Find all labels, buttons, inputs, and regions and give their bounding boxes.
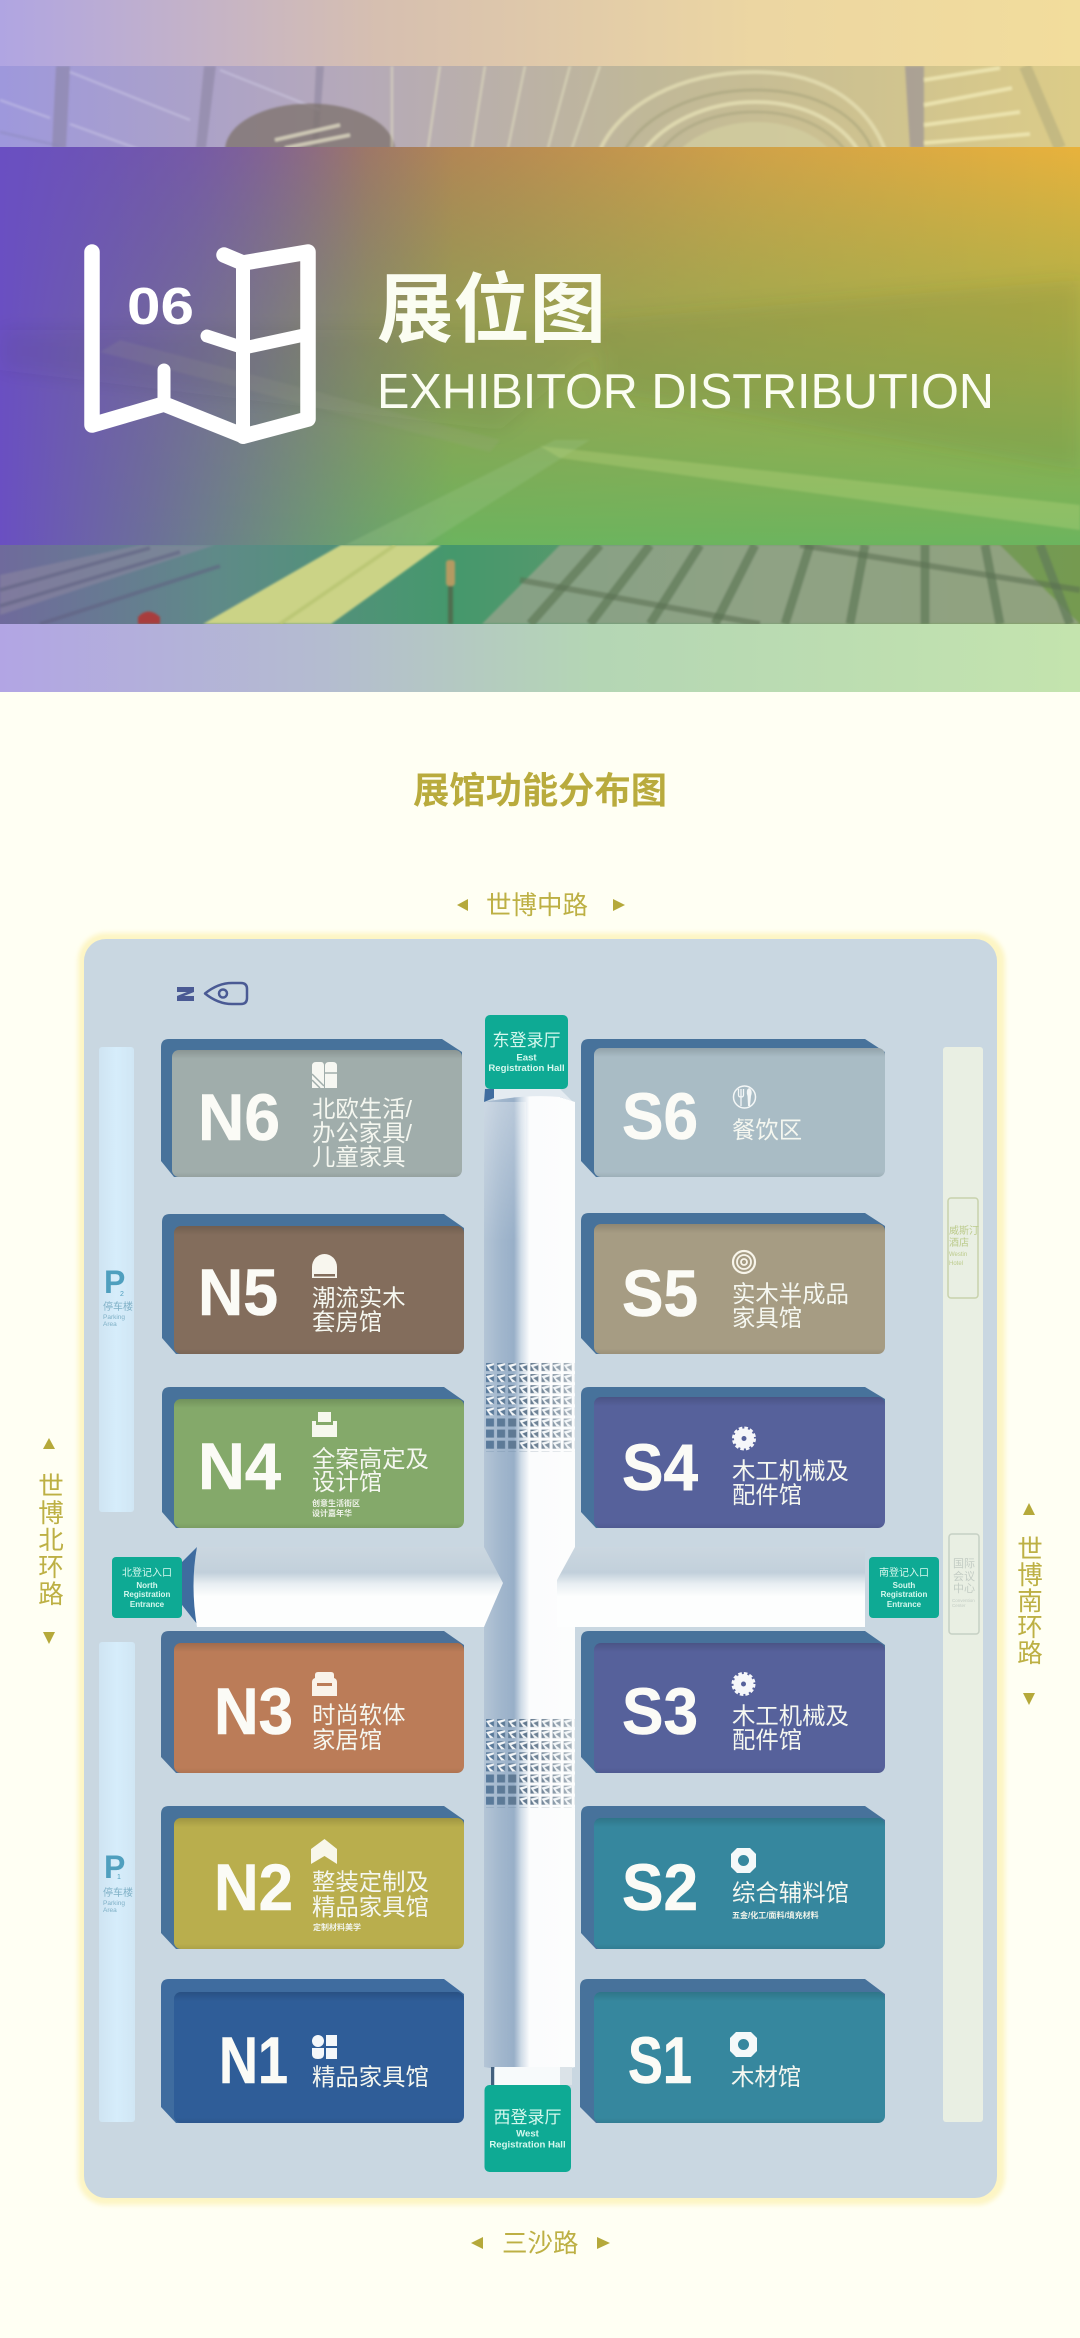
hall S4 [581, 1387, 885, 1528]
icon: S6 [734, 1086, 756, 1108]
icon: N6 [312, 1062, 337, 1088]
hall S3: 木工机械及 [732, 1703, 849, 1729]
parking strip P2: Parking [103, 1314, 125, 1321]
hall S3: S3 [622, 1674, 698, 1748]
hall S3: 配件馆 [732, 1727, 802, 1753]
hall S1 [580, 1979, 885, 2123]
icon: N2 [311, 1839, 337, 1864]
icon: S2 [731, 1848, 756, 1873]
hall N4: 全案高定及 [312, 1446, 429, 1472]
Westin hotel box: Hotel [949, 1261, 963, 1267]
east registration hall: 东登录厅 [492, 1031, 560, 1050]
parking strip P2: 2 [120, 1291, 124, 1298]
west registration hall: 西登录厅 [494, 2108, 562, 2127]
east registration hall [485, 1015, 568, 1089]
convention centre box: 国际 [953, 1557, 975, 1570]
parking strip P2 [99, 1047, 134, 1512]
road label: right: 南 [1017, 1588, 1043, 1616]
road label: bottom [471, 2230, 610, 2258]
hall S5 [581, 1213, 885, 1354]
hall N3: N3 [214, 1674, 293, 1748]
hall N4: 创意生活街区 [312, 1498, 360, 1508]
hall N1 [161, 1979, 464, 2123]
hall N5: N5 [198, 1255, 278, 1329]
icon: N3 [312, 1672, 337, 1696]
north registration entrance: Registration [124, 1590, 170, 1599]
hall N6: 儿童家具 [312, 1144, 406, 1170]
window grid lower [485, 1718, 575, 1808]
convention centre box: Center [952, 1603, 966, 1608]
parking strip P1 [99, 1642, 135, 2122]
north registration entrance: North [136, 1581, 158, 1590]
hall S4: 配件馆 [732, 1482, 802, 1508]
road label: left: 博 [38, 1500, 64, 1528]
convention centre box: 中心 [953, 1582, 975, 1595]
road label: right: 博 [1017, 1562, 1043, 1590]
parking strip P2: 停车楼 [103, 1300, 133, 1313]
hotel strip [943, 1047, 983, 2122]
hall N4 [162, 1387, 464, 1528]
hall N2: 精品家具馆 [312, 1894, 429, 1920]
hall S5: S5 [622, 1256, 698, 1330]
hall N2 [161, 1806, 464, 1949]
hero gradient block [0, 147, 1080, 545]
hero photo strip: floor [0, 545, 1080, 624]
hero subtitle: EXHIBITOR DISTRIBUTION [377, 365, 994, 419]
road label: bottom: 三沙路 [502, 2230, 579, 2258]
icon: N4 [312, 1412, 337, 1437]
hall N6: 北欧生活/ [312, 1096, 413, 1122]
hall S2: 五金/化工/面料/填充材料 [732, 1910, 819, 1920]
hero photo strip: roof [0, 66, 1080, 147]
convention centre box: 会议 [953, 1570, 975, 1583]
parking strip P2: Area [103, 1321, 117, 1328]
hall N1: 精品家具馆 [312, 2064, 429, 2090]
south registration entrance: South [893, 1581, 915, 1590]
hall S2: 综合辅料馆 [732, 1880, 849, 1906]
parking strip P2: P [104, 1264, 125, 1300]
hall S4: 木工机械及 [732, 1458, 849, 1484]
hall N1: N1 [219, 2023, 288, 2097]
north registration entrance: Entrance [130, 1600, 165, 1609]
central concourse column [484, 1089, 575, 2085]
east registration hall: East [516, 1052, 537, 1064]
hall N5: 潮流实木 [312, 1285, 406, 1311]
hall S1: S1 [628, 2023, 692, 2097]
Westin hotel box: 威斯汀 [949, 1224, 979, 1237]
road label: right: 世 [1017, 1536, 1043, 1564]
hall N4: 设计嘉年华 [312, 1508, 352, 1518]
hero banner [0, 0, 1080, 692]
icon: N1 [312, 2035, 337, 2059]
hall N4: N4 [198, 1429, 281, 1503]
south registration entrance: Registration [881, 1590, 927, 1599]
hall S3 [581, 1631, 885, 1773]
hall N2: 定制材料美学 [313, 1922, 361, 1932]
hall S5: 实木半成品 [732, 1281, 849, 1307]
parking strip P1: P [104, 1849, 125, 1885]
road label: left: 世 [38, 1473, 64, 1501]
north wing [182, 1547, 503, 1627]
road label: top: 世博中路 [486, 892, 588, 920]
hall N2: N2 [214, 1850, 293, 1924]
south wing [557, 1547, 865, 1627]
hall S2 [581, 1806, 885, 1949]
south registration entrance [869, 1557, 939, 1618]
hall S2: S2 [622, 1850, 698, 1924]
parking strip P1: Parking [103, 1900, 125, 1907]
icon: N5 [312, 1254, 337, 1278]
south registration entrance: Entrance [887, 1600, 922, 1609]
hall S4: S4 [622, 1430, 698, 1504]
icon: section 06 map [92, 252, 308, 437]
road label: right: 环 [1017, 1614, 1043, 1642]
hall N5: 套房馆 [312, 1309, 382, 1335]
hall S6: S6 [622, 1079, 698, 1153]
Westin hotel box: 酒店 [949, 1236, 969, 1249]
hall S6: 餐饮区 [732, 1117, 802, 1143]
hall S1: 木材馆 [731, 2064, 801, 2090]
road label: right [1017, 1503, 1043, 1705]
hall N3: 时尚软体 [312, 1702, 406, 1728]
section heading: 展馆功能分布图 [413, 770, 667, 811]
hall N3: 家居馆 [312, 1727, 382, 1753]
west registration hall: Registration Hall [489, 2140, 566, 2150]
section number: 06 [127, 278, 194, 336]
road label: top [457, 892, 625, 920]
window grid upper [485, 1362, 575, 1452]
convention centre box: Convention [952, 1598, 975, 1603]
east registration hall: Registration Hall [488, 1063, 565, 1074]
Westin hotel box: Westin [949, 1252, 967, 1258]
Westin hotel box [948, 1198, 979, 1298]
road label: left [38, 1438, 64, 1644]
north registration entrance [112, 1557, 182, 1618]
hall N2: 整装定制及 [312, 1869, 429, 1895]
south registration entrance: 南登记入口 [879, 1566, 929, 1579]
convention centre box [949, 1534, 979, 1634]
hall N5 [162, 1214, 464, 1354]
icon: S5 [733, 1251, 755, 1273]
hall N3 [161, 1631, 464, 1773]
hall N4: 设计馆 [312, 1469, 382, 1495]
road label: right: 路 [1017, 1640, 1043, 1668]
hall N6 [161, 1039, 462, 1177]
road label: left: 路 [38, 1581, 64, 1609]
hall N6: 办公家具/ [312, 1120, 413, 1146]
north registration entrance: 北登记入口 [122, 1566, 172, 1579]
hall S6 [581, 1039, 885, 1177]
panel: floor plan [78, 933, 1005, 2205]
hero title: 展位图 [377, 268, 606, 353]
hall S5: 家具馆 [732, 1305, 802, 1331]
road label: left: 北 [38, 1527, 64, 1555]
west registration hall [484, 2085, 571, 2172]
parking strip P1: Area [103, 1907, 117, 1914]
road label: left: 环 [38, 1554, 64, 1582]
parking strip P1: 停车楼 [103, 1886, 133, 1899]
parking strip P1: 1 [117, 1874, 121, 1881]
icon: north compass [177, 983, 247, 1004]
hall N6: N6 [198, 1080, 280, 1154]
icon: S4 [734, 1428, 754, 1449]
icon: S3 [733, 1674, 754, 1694]
west registration hall: West [516, 2128, 540, 2140]
icon: S1 [730, 2032, 757, 2057]
